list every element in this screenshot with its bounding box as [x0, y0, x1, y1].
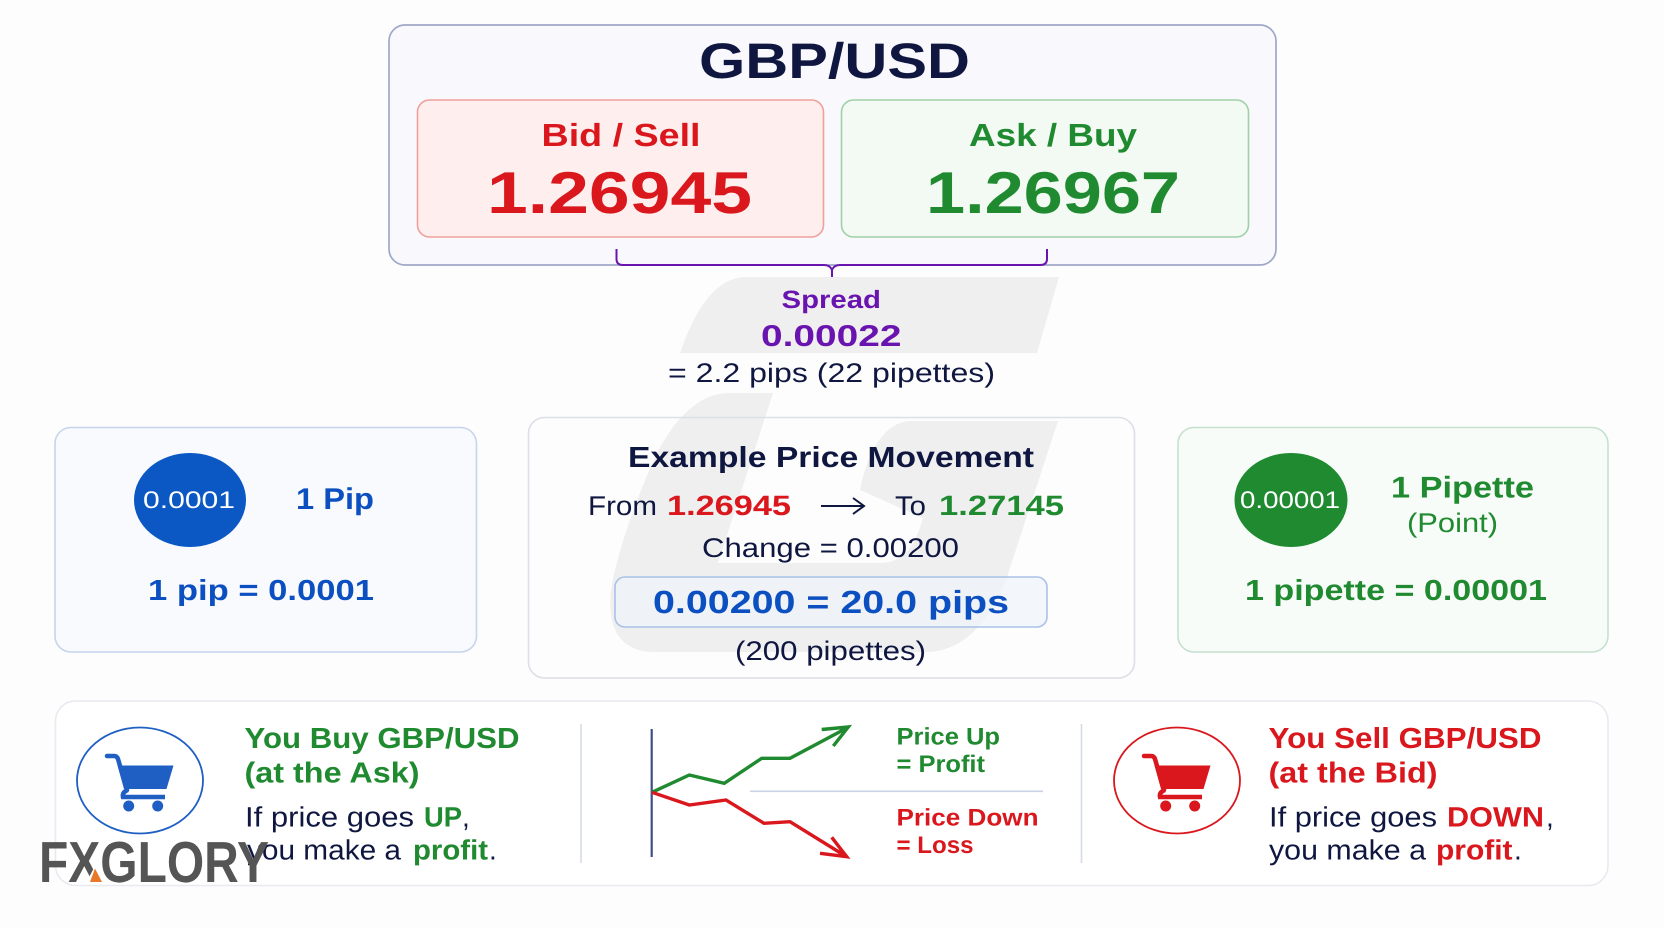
sell text block: you make a — [1269, 834, 1426, 866]
buy text block: UP — [424, 802, 462, 832]
spread bracket — [616, 249, 1047, 277]
label: price down: = Loss — [896, 832, 974, 859]
panel: buy and sell scenarios — [56, 701, 1608, 886]
chart: price up and down paths — [652, 724, 1043, 859]
icon: pipette badge — [1234, 453, 1348, 547]
panel: example price movement: Example Price Movement — [628, 442, 1034, 474]
spread text block: = 2.2 pips (22 pipettes) — [668, 358, 995, 388]
sell text block — [1268, 723, 1554, 866]
panel: example price movement — [528, 418, 1134, 678]
panel: ask: Ask / Buy — [969, 117, 1137, 153]
sell text block: (at the Bid) — [1268, 758, 1438, 790]
panel: bid — [418, 100, 824, 237]
from-to line: 1.26945 — [667, 490, 791, 521]
icon: blue cart — [77, 728, 203, 834]
panel: GBP/USD quote — [389, 25, 1276, 265]
from-to line: 1.27145 — [939, 490, 1064, 521]
panel: bid: 1.26945 — [487, 160, 752, 226]
label: price down — [896, 804, 1038, 859]
buy text block: , — [462, 802, 470, 832]
icon: red cart — [1114, 728, 1240, 834]
result callout — [615, 577, 1047, 627]
sell text block: If price goes — [1269, 802, 1437, 832]
sell text block: profit — [1436, 834, 1512, 866]
panel: 1 pip: 1 pip = 0.0001 — [148, 575, 374, 607]
panel: ask: 1.26967 — [926, 160, 1180, 226]
buy text block: profit — [413, 834, 488, 866]
buy text block: (at the Ask) — [244, 758, 420, 790]
panel: ask — [842, 100, 1248, 237]
label: price up — [896, 724, 1000, 778]
spread text block: 0.00022 — [761, 320, 902, 353]
spread text block — [668, 286, 995, 388]
panel: example price movement: (200 pipettes) — [735, 636, 926, 666]
panel: 1 pipette: (Point) — [1407, 508, 1498, 538]
from-to line — [588, 490, 1064, 521]
panel: 1 pipette — [1178, 428, 1608, 652]
label: price up: Price Up — [896, 724, 1000, 750]
label: price down: Price Down — [896, 804, 1038, 832]
panel: example price movement: Change = 0.00200 — [702, 533, 959, 563]
sell text block: , — [1546, 802, 1554, 832]
panel: bid: Bid / Sell — [542, 117, 700, 153]
title: GBP/USD — [699, 33, 970, 89]
arrow: price up — [652, 727, 848, 792]
icon: pipette badge: 0.00001 — [1240, 487, 1340, 514]
panel: 1 pipette: 1 Pipette — [1391, 472, 1534, 504]
icon: pip badge: 0.0001 — [143, 487, 235, 514]
from-to line: From — [588, 491, 657, 521]
buy text block — [244, 723, 520, 866]
sell text block: DOWN — [1447, 802, 1544, 832]
panel: 1 pip — [55, 428, 476, 652]
label: price up: = Profit — [896, 751, 985, 778]
sell text block: You Sell GBP/USD — [1268, 723, 1542, 755]
icon: pip badge — [134, 453, 246, 547]
spread text block: Spread — [782, 286, 881, 314]
buy text block: If price goes — [245, 802, 414, 832]
panel: 1 pipette: 1 pipette = 0.00001 — [1245, 575, 1547, 607]
buy text block: You Buy GBP/USD — [244, 723, 520, 755]
buy text block: you make a — [247, 834, 401, 866]
result callout: 0.00200 = 20.0 pips — [653, 584, 1009, 620]
watermark logo — [610, 277, 1059, 652]
logo: FXGLORY: FXGLORY — [39, 830, 269, 895]
arrow: price down — [652, 792, 847, 857]
panel: 1 pip: 1 Pip — [296, 483, 374, 516]
sell text block: . — [1514, 834, 1522, 866]
buy text block: . — [489, 834, 497, 866]
from-to line: To — [895, 491, 926, 521]
